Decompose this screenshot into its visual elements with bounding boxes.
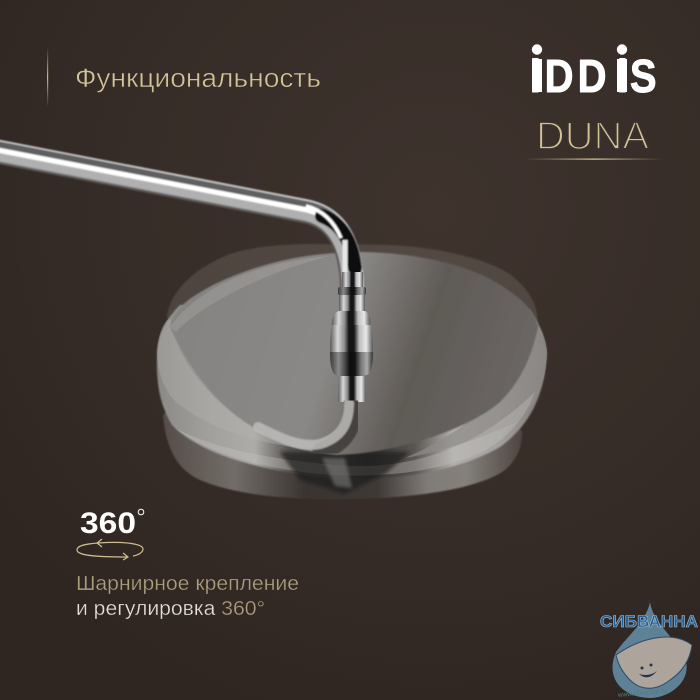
rim of disc — [157, 305, 547, 479]
face light slice — [170, 256, 330, 332]
barrel upper — [330, 325, 373, 353]
upper arm pipe — [0, 140, 363, 290]
lower arm pipe — [258, 403, 353, 451]
pipe end — [342, 272, 363, 290]
lower light band — [175, 392, 535, 476]
central light reflection — [322, 458, 352, 488]
description line 1: Шарнирное крепление — [76, 573, 299, 595]
ghost: bottom rotation position — [163, 400, 522, 499]
swivel connector — [330, 272, 373, 402]
logo: iDDiS: iDDiS — [530, 51, 657, 103]
pale right glass band — [405, 325, 547, 458]
pale left glass band — [157, 318, 300, 448]
degree mark — [138, 509, 144, 515]
upper neck — [339, 295, 365, 313]
icon: rotation arrows — [77, 539, 143, 560]
shower head with rotation ghosts — [157, 244, 547, 499]
watermark: СИБВАННА — [600, 602, 698, 699]
disc face — [170, 252, 538, 455]
description line 2: и регулировка 360° — [76, 598, 265, 620]
lower neck — [338, 376, 366, 402]
title: Функциональность — [75, 63, 321, 93]
watermark bath — [616, 637, 692, 688]
badge: 360 degrees — [77, 507, 144, 560]
barrel lower — [330, 352, 373, 377]
series name: DUNA: DUNA — [536, 115, 649, 158]
upper collar — [338, 287, 366, 295]
flare — [332, 311, 370, 327]
series underline — [525, 158, 663, 160]
description text — [76, 573, 299, 620]
watermark url: www.sibvanna.ru — [617, 688, 668, 699]
number 360: 360 — [80, 507, 136, 540]
title rule — [47, 47, 48, 107]
watermark face — [639, 664, 657, 677]
watermark drop — [613, 602, 687, 698]
ghost: top rotation position — [167, 244, 538, 380]
watermark name: СИБВАННА — [600, 613, 698, 631]
central dark reflection — [280, 452, 410, 494]
